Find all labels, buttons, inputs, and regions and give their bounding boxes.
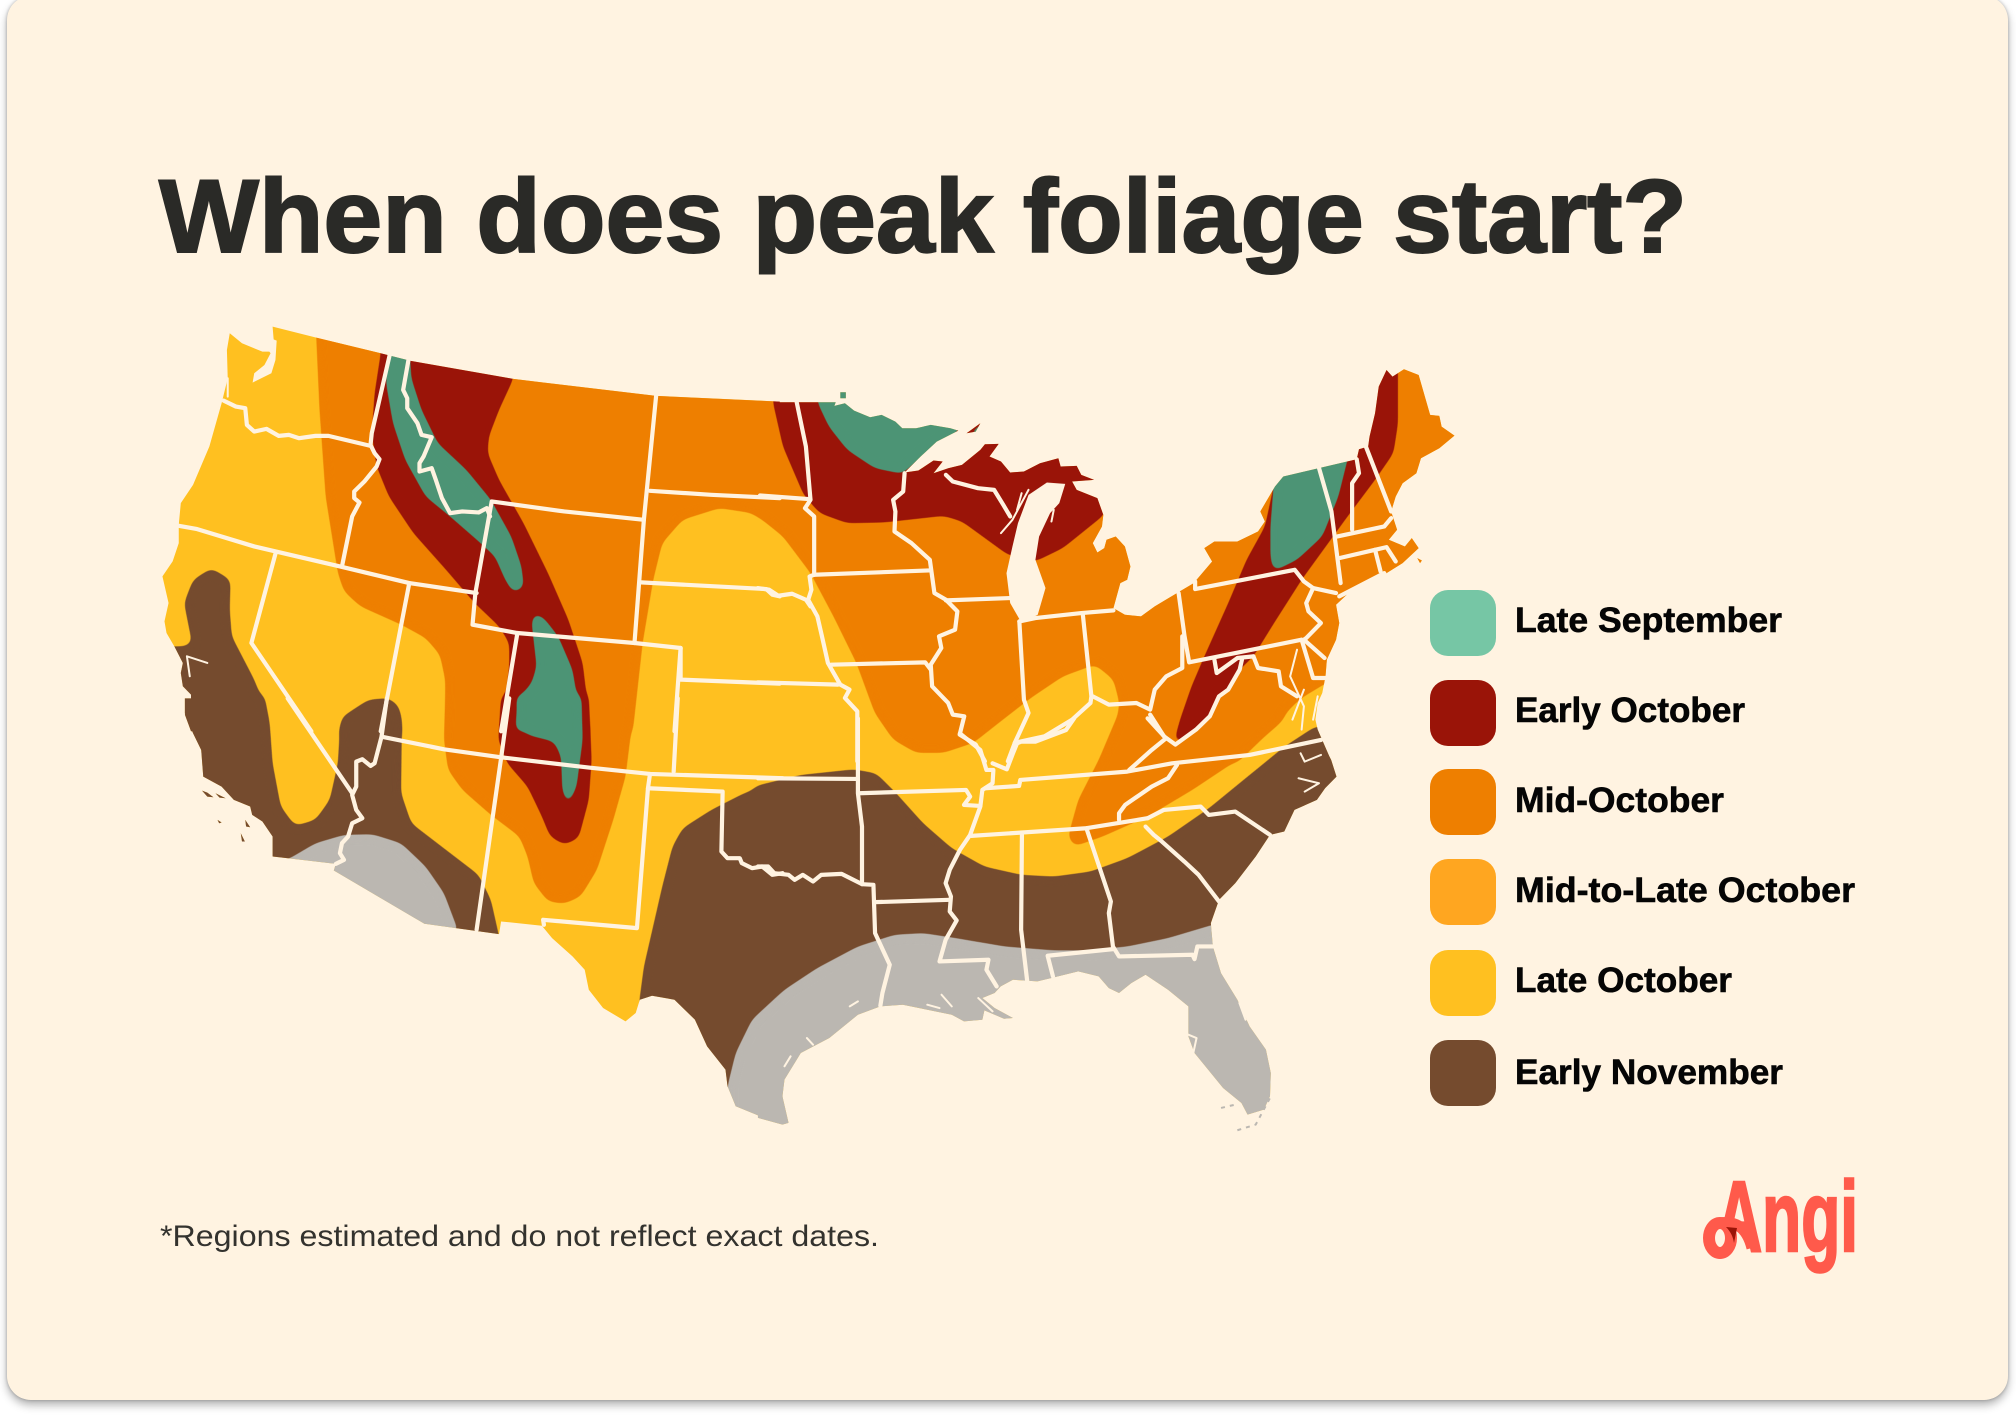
legend: early November [1430, 1040, 1783, 1106]
footnote: *Regions estimated and do not reflect exact dates. [160, 1220, 879, 1253]
legend: early October: Early October [1515, 691, 1745, 730]
legend: late October [1430, 950, 1732, 1016]
logo: Angi: Angi [1716, 1161, 1858, 1273]
coastal inlets and sounds [187, 378, 1321, 1066]
legend: early November: Early November [1515, 1053, 1783, 1092]
legend: mid-to-late October: Mid-to-Late October [1515, 871, 1855, 910]
region: no peak data (gray) [288, 834, 1271, 1125]
Puget Sound [253, 335, 277, 383]
region: mid-October [316, 317, 1494, 904]
legend: mid-October: Mid-October [1515, 781, 1724, 820]
region: early October [372, 330, 1398, 845]
legend: late September: Late September [1515, 601, 1782, 640]
legend: late October: Late October [1515, 961, 1732, 1000]
legend [1430, 590, 1855, 1106]
Lake Michigan [1006, 483, 1065, 623]
legend: late September [1430, 590, 1782, 656]
legend: mid-to-late October [1430, 859, 1855, 925]
land fill: late October base [162, 326, 1454, 1125]
state borders [179, 355, 1396, 1006]
map: peak foliage regions of the contiguous US [162, 326, 1454, 1132]
region: early November [174, 570, 1336, 1088]
legend: early October [1430, 680, 1745, 746]
legend: mid-October [1430, 769, 1724, 835]
title: When does peak foliage start? [159, 159, 1687, 275]
region: late September [386, 330, 1351, 807]
Florida Keys [1221, 1098, 1270, 1130]
logo: Angi [1709, 1161, 1858, 1273]
